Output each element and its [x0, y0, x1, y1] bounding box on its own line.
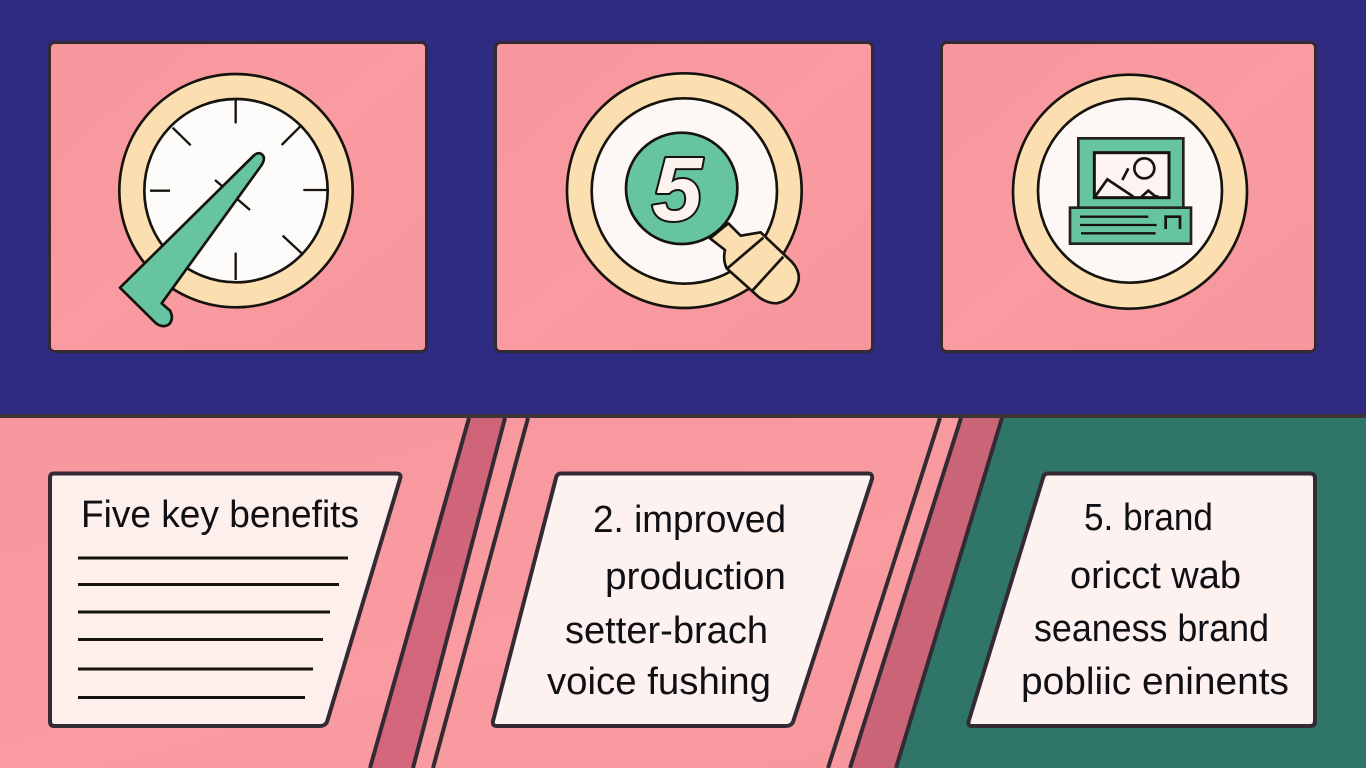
icon: monitor with image [1013, 75, 1247, 309]
panel: computer [942, 42, 1316, 352]
list placeholder lines [78, 558, 348, 698]
card text [547, 499, 786, 703]
card: improved production [493, 474, 872, 726]
bottom band background [0, 417, 1366, 768]
icon: magnifying glass with five [567, 73, 802, 308]
card text: production [605, 556, 786, 598]
card text: seaness brand [1034, 608, 1269, 650]
card text [1021, 497, 1289, 703]
number five: 5 [652, 140, 704, 240]
green section [896, 418, 1366, 768]
card text: 2. improved [593, 499, 786, 541]
card heading: Five key benefits [81, 494, 359, 536]
card: brand [968, 474, 1315, 726]
diagonal stripes: left [370, 418, 528, 768]
band divider [0, 414, 1366, 418]
top band background [0, 0, 1366, 415]
card text: 5. brand [1084, 497, 1213, 539]
card text: oricct wab [1070, 555, 1241, 597]
panel: clock [50, 42, 426, 352]
card: five key benefits [50, 474, 400, 726]
card text: voice fushing [547, 661, 771, 703]
icon: clock gauge [119, 74, 353, 326]
diagonal stripes: right [828, 418, 1002, 768]
panel: magnifier [496, 42, 872, 352]
card text: setter-brach [565, 610, 768, 652]
card text: pobliic eninents [1021, 661, 1289, 703]
